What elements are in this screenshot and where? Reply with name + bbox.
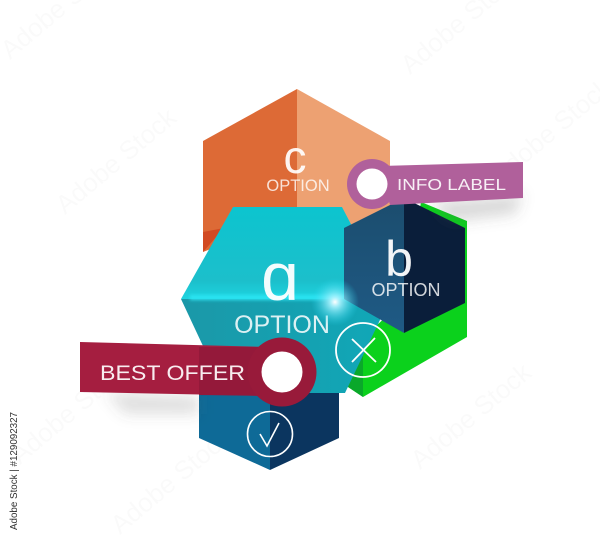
label text: BEST OFFER — [100, 361, 245, 385]
hexagon: orange option c — [203, 89, 390, 252]
hexagon: navy option b — [344, 198, 465, 333]
stock id caption: Adobe Stock | #129092327 — [8, 412, 20, 530]
hexagon: cyan option a — [181, 207, 390, 393]
label text: INFO LABEL — [397, 177, 506, 194]
watermarks: Adobe Stock — [105, 421, 238, 540]
ribbon: best offer — [80, 338, 316, 414]
letter a: ɑ — [261, 239, 299, 315]
label: option a: OPTION — [234, 311, 330, 339]
label: option c: OPTION — [266, 177, 330, 195]
label: option b: OPTION — [371, 280, 441, 300]
highlight line — [190, 295, 385, 300]
icon: cross — [336, 323, 390, 377]
white dot — [262, 352, 302, 392]
watermarks: Adobe Stock — [50, 101, 183, 220]
letter c: c — [284, 131, 306, 183]
letter b: b — [385, 231, 413, 287]
light glare — [311, 278, 359, 326]
watermarks: Adobe Stock — [5, 351, 138, 470]
ribbon: info label — [347, 159, 523, 222]
hexagon: blue with check — [199, 385, 339, 470]
icon: check mark — [248, 412, 292, 456]
hexagon: green — [345, 202, 467, 397]
watermarks: Adobe Stock — [405, 356, 538, 475]
white dot — [356, 168, 388, 200]
